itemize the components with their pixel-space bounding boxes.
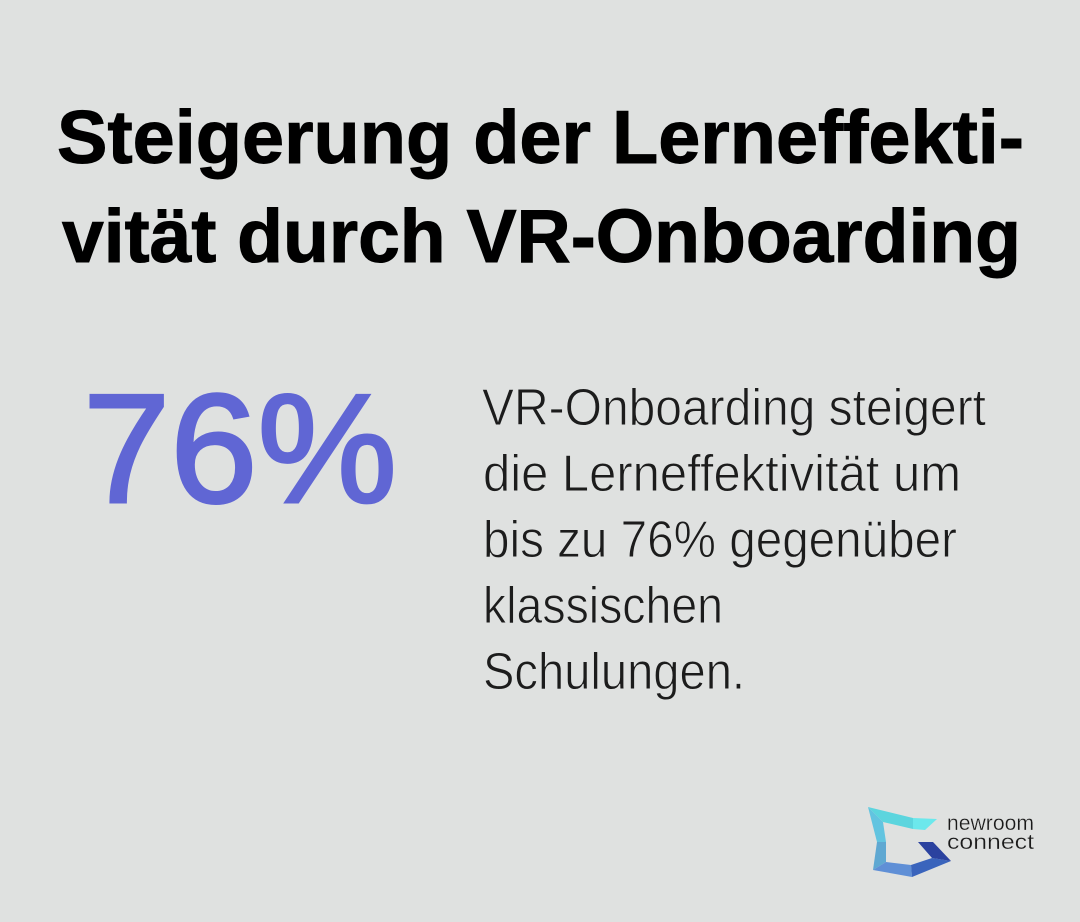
description text [482,379,987,701]
logo wordmark: newroom [947,812,1034,835]
title: Steigerung der Lerneffekti- [57,95,1024,179]
icon: logo mark [868,807,951,877]
title: vität durch VR-Onboarding [62,194,1021,278]
description text: die Lerneffektivität um [483,445,961,503]
description text: VR-Onboarding steigert [482,379,987,437]
description text: bis zu 76% gegenüber [483,511,957,569]
big statistic: 76%: 76% [83,362,397,535]
description text: Schulungen. [483,643,745,701]
title [57,95,1024,278]
logo wordmark [947,812,1034,854]
description text: klassischen [483,577,723,635]
logo wordmark: connect [947,831,1034,854]
logo: newroom connect [868,807,1034,877]
